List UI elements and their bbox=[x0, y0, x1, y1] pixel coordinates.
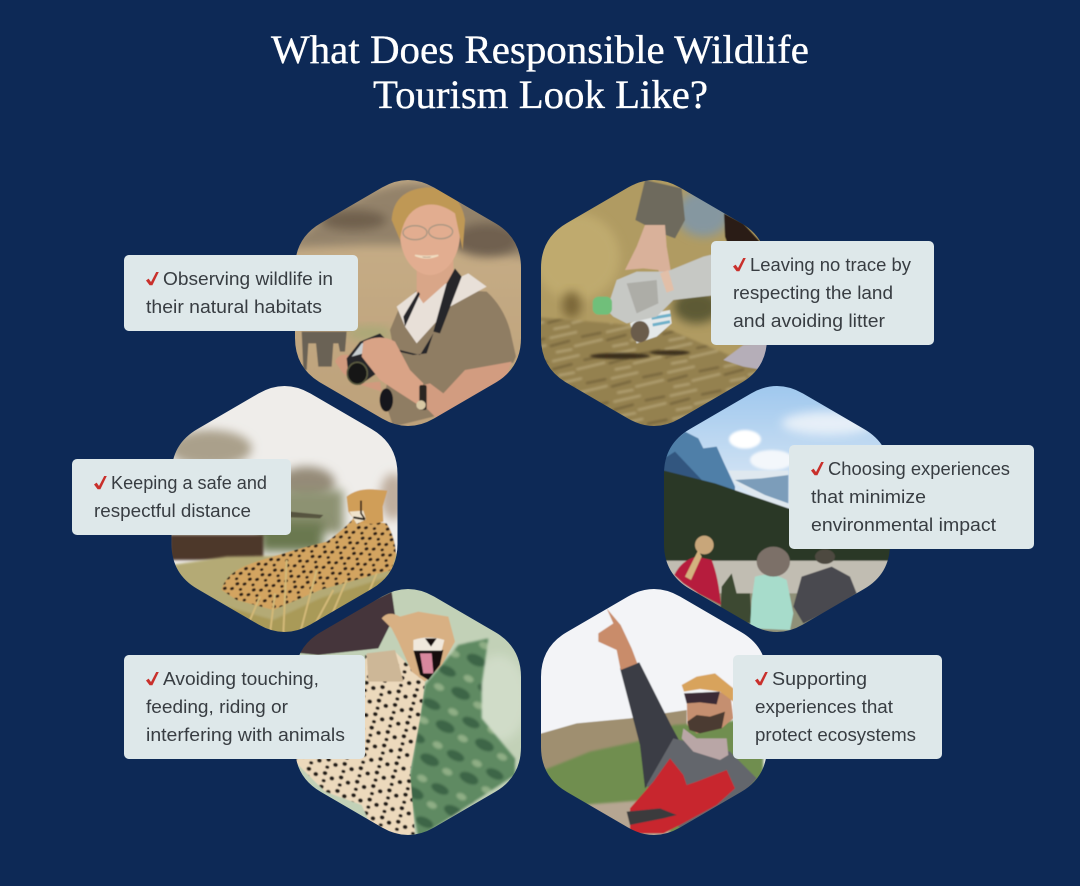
callout text bbox=[755, 668, 916, 745]
callout text: respectful distance bbox=[94, 500, 251, 521]
hand bbox=[625, 224, 671, 272]
bottle cap bbox=[593, 297, 612, 315]
callout text: Keeping a safe and bbox=[111, 472, 267, 493]
glacier bbox=[729, 470, 788, 489]
callout text bbox=[811, 458, 1010, 535]
photo hexagon: hand picking up plastic bottle bbox=[541, 180, 767, 426]
photo hexagon: woman with camera bbox=[295, 180, 521, 426]
ground bbox=[174, 552, 397, 622]
photo hexagon: cheetah resting with safari vehicle behind bbox=[172, 386, 398, 632]
camera bbox=[347, 333, 387, 385]
forest bbox=[664, 470, 890, 562]
glasses bbox=[403, 225, 453, 240]
callout text: Observing wildlife in bbox=[163, 268, 333, 289]
callout text: and avoiding litter bbox=[733, 310, 885, 331]
cheetah head bbox=[382, 612, 455, 682]
title: What Does Responsible Wildlife bbox=[271, 27, 809, 72]
callout: protect ecosystems bbox=[733, 655, 942, 759]
callout text: interfering with animals bbox=[146, 724, 345, 745]
tree trunk bbox=[285, 592, 395, 655]
callout: observing wildlife bbox=[124, 255, 358, 331]
watch bbox=[419, 385, 427, 410]
bottle bbox=[608, 253, 717, 323]
callout text bbox=[94, 472, 267, 521]
callout text bbox=[146, 668, 345, 745]
title bbox=[271, 27, 809, 117]
elephant legs bbox=[302, 332, 347, 370]
neck bbox=[417, 257, 453, 303]
strap bbox=[398, 268, 462, 355]
small trees bbox=[720, 573, 752, 623]
callout text: feeding, riding or bbox=[146, 696, 288, 717]
sleeve bbox=[635, 180, 685, 238]
check icon bbox=[755, 672, 768, 685]
person in mint shirt and hat bbox=[750, 575, 793, 630]
callout text: Leaving no trace by bbox=[750, 254, 912, 275]
left hand bbox=[335, 355, 382, 392]
vehicle bbox=[290, 512, 323, 518]
check icon bbox=[811, 462, 824, 475]
bush bbox=[408, 638, 515, 838]
callout text: Supporting bbox=[772, 668, 867, 689]
callout text: environmental impact bbox=[811, 514, 996, 535]
callout text: Avoiding touching, bbox=[163, 668, 319, 689]
dress bbox=[383, 287, 516, 427]
right hand bbox=[362, 337, 423, 405]
callout text: that minimize bbox=[811, 486, 926, 507]
head bbox=[400, 204, 460, 274]
lake bbox=[666, 560, 888, 594]
check icon bbox=[733, 258, 746, 271]
check icon bbox=[146, 272, 159, 285]
torso bbox=[647, 738, 757, 828]
dark clothing bbox=[724, 214, 760, 241]
hair bbox=[392, 187, 465, 250]
woman in red jacket bbox=[674, 557, 721, 605]
cheetah body bbox=[292, 652, 425, 835]
sunglasses bbox=[684, 692, 720, 704]
title: Tourism Look Like? bbox=[373, 72, 708, 117]
check icon bbox=[146, 672, 159, 685]
scarf bbox=[397, 273, 487, 343]
cup bbox=[630, 310, 672, 343]
callout: leaving no trace bbox=[711, 241, 934, 345]
raised arm bbox=[620, 662, 682, 788]
life vest bbox=[630, 758, 735, 833]
cheetah head bbox=[347, 489, 387, 524]
callout: avoid touching animals bbox=[124, 655, 365, 759]
cheetah body bbox=[222, 518, 396, 610]
face bbox=[687, 692, 733, 733]
mountains bbox=[662, 432, 735, 493]
shoe bbox=[723, 345, 767, 370]
callout text: experiences that bbox=[755, 696, 893, 717]
photo hexagon: man pointing in red life vest bbox=[530, 585, 780, 845]
callout: safe distance bbox=[72, 459, 291, 535]
photo hexagon: tourists viewing mountains and lake bbox=[664, 386, 890, 632]
man in grey shirt bbox=[793, 567, 857, 623]
callout text: Choosing experiences bbox=[828, 458, 1010, 479]
callout text bbox=[146, 268, 333, 317]
hills bbox=[530, 710, 687, 845]
smile bbox=[415, 255, 438, 258]
hand bbox=[598, 608, 637, 670]
callout text bbox=[733, 254, 912, 331]
callout text: respecting the land bbox=[733, 282, 893, 303]
lens cap bbox=[380, 388, 393, 412]
cap bbox=[682, 673, 733, 702]
check icon bbox=[94, 476, 107, 489]
callout text: their natural habitats bbox=[146, 296, 322, 317]
ground bbox=[541, 317, 757, 426]
neck scarf bbox=[682, 728, 728, 760]
foreground grass bbox=[228, 577, 386, 632]
arm bbox=[417, 362, 512, 418]
photo hexagon: yawning cheetah by bush bbox=[285, 585, 535, 845]
callout text: protect ecosystems bbox=[755, 724, 916, 745]
callout: minimize environmental impact bbox=[789, 445, 1034, 549]
